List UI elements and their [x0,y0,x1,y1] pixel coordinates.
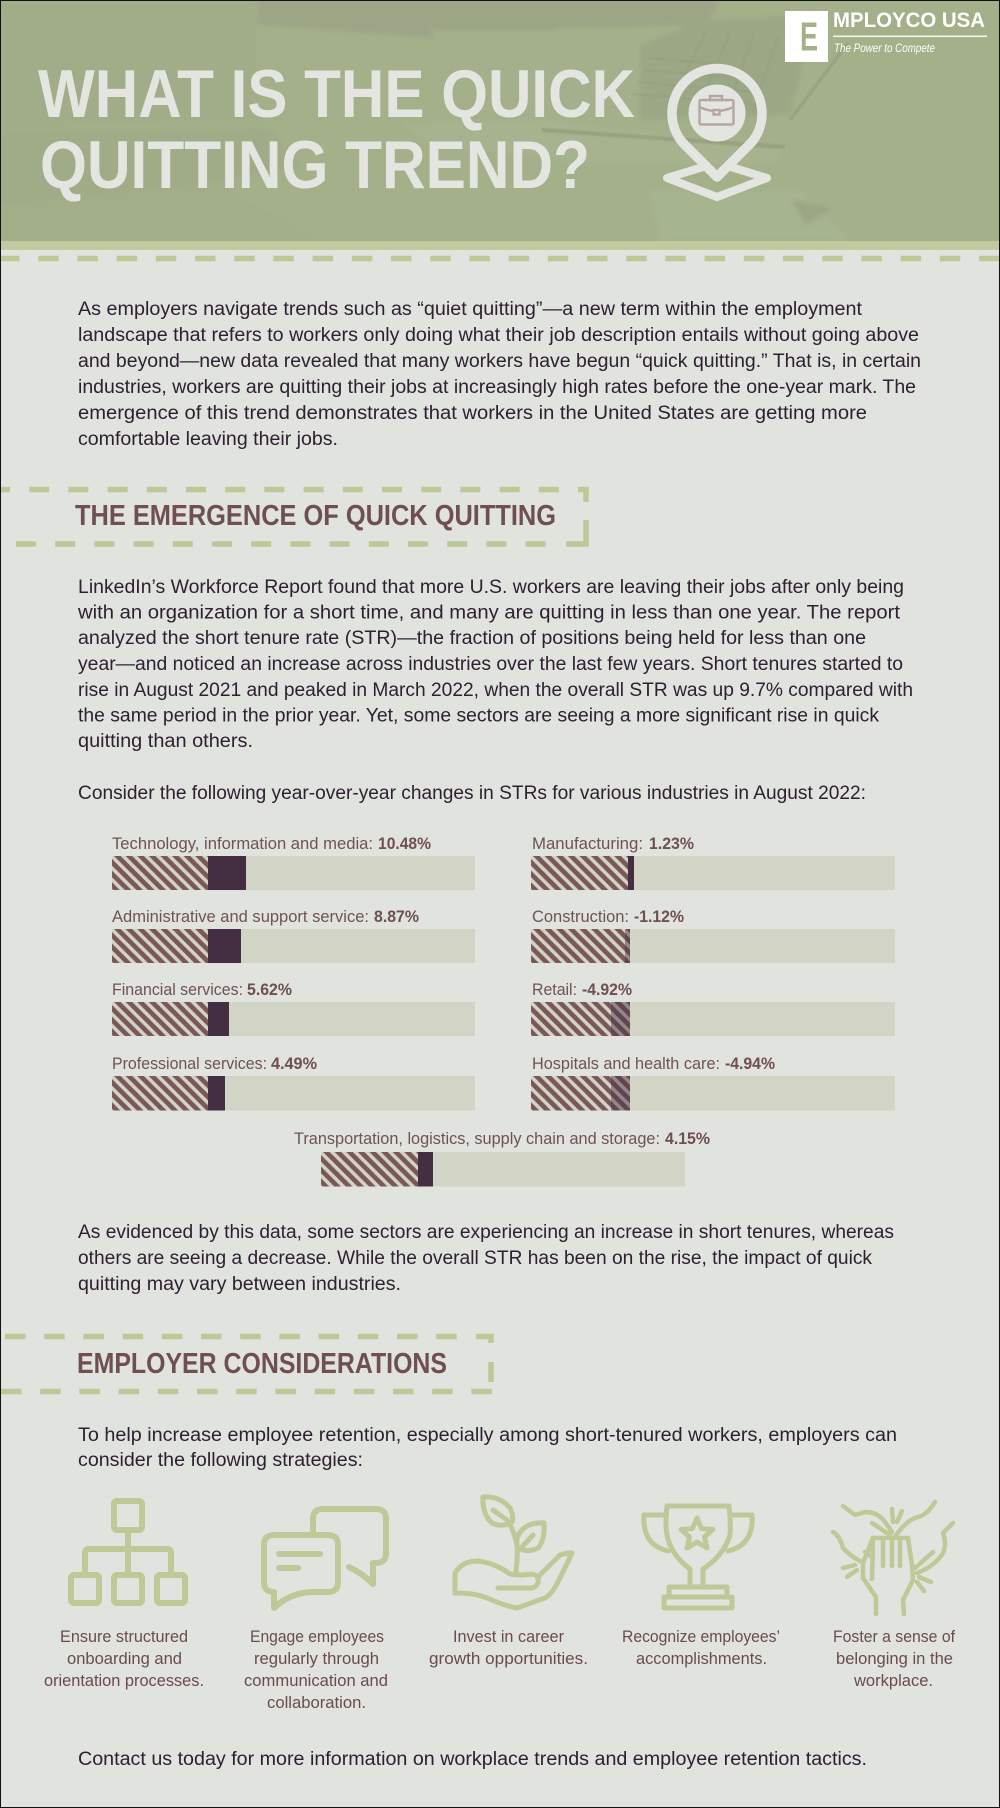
bar: retail: -4.92% [582,980,632,999]
icon: chat bubbles [264,1509,386,1608]
text block: LinkedIn report: with an organization for a short time, and many are quitting in less than one year. The report [77,602,901,624]
strategy: onboarding: orientation processes. [44,1671,204,1690]
title: QUITTING TREND? [40,127,590,203]
heading: the emergence of quick quitting [0,490,586,544]
text block: contact call to action: Contact us today for more information on workplace trends and employee retention tactics. [78,1749,867,1770]
strategy: onboarding: Ensure structured [60,1627,188,1646]
text block: strategies intro: To help increase employee retention, especially among short-tenured workers, employers can [78,1425,897,1446]
strategy: engagement: Engage employees [250,1627,384,1646]
bar: transportation: 4.15% [665,1129,710,1148]
text block: LinkedIn report: the same period in the prior year. Yet, some sectors are seeing a more significant rise in quick [78,706,880,726]
logo [785,9,987,62]
text block: strategies intro: consider the following strategies: [78,1450,363,1471]
bar: financial: Financial services: [112,980,243,999]
bar: manufacturing [531,834,895,890]
text block: introduction: and beyond—new data revealed that many workers have begun “quick quitting.” That is, in certain [78,351,921,372]
strategy: recognition: accomplishments. [636,1649,767,1668]
strategy: career growth [429,1497,588,1668]
strategy: career growth: Invest in career [453,1627,564,1646]
panel: header banner [0,0,1000,258]
bar: retail: Retail: [532,980,577,999]
strategy: recognition [622,1506,780,1668]
bar: professional: Professional services: [112,1054,267,1073]
logo: E [800,14,818,60]
text block: introduction: industries, workers are quitting their jobs at increasingly high rates before the one-year mark. The [78,377,916,398]
strategy: belonging: Foster a sense of [833,1627,955,1646]
bar: manufacturing: Manufacturing: [532,834,643,853]
strategy: engagement: regularly through [254,1649,379,1668]
bar: construction [531,907,895,963]
bar: professional [112,1054,475,1110]
strategy: onboarding [44,1501,204,1690]
header dashed line [0,256,1000,261]
icon: org chart [71,1501,185,1603]
bar: administrative: Administrative and support service: [112,907,369,926]
strategy: engagement: communication and [244,1671,388,1690]
text block: LinkedIn report: rise in August 2021 and peaked in March 2022, when the overall STR was up 9.7% compared with [78,680,913,701]
icon: location pin with briefcase [667,69,767,197]
strategy: engagement [244,1509,388,1712]
heading: employer considerations [1,1336,492,1392]
strategy: onboarding: onboarding and [67,1649,182,1668]
text block: introduction: comfortable leaving their jobs. [78,429,338,450]
strategy: engagement: collaboration. [267,1693,366,1712]
title: WHAT IS THE QUICK [38,56,635,132]
strategy: belonging: workplace. [853,1671,933,1690]
text block: LinkedIn report [77,577,913,752]
bar: construction: -1.12% [634,907,684,926]
bar: technology: Technology, information and media: [112,834,373,853]
logo: The Power to Compete [834,41,935,55]
icon: hands together [833,1502,953,1614]
bar: construction: Construction: [532,907,629,926]
strategy: belonging: belonging in the [836,1649,953,1668]
text block: chart conclusion [78,1222,894,1295]
bar: financial [112,980,475,1036]
text block: LinkedIn report: quitting than others. [78,731,253,752]
bar: administrative: 8.87% [374,907,419,926]
title [38,56,635,203]
bar: manufacturing: 1.23% [649,834,694,853]
bar: hospitals: Hospitals and health care: [532,1054,720,1073]
text block: LinkedIn report: LinkedIn’s Workforce Report found that more U.S. workers are leaving their jobs after only being [78,577,904,598]
bar: professional: 4.49% [271,1054,317,1073]
icon: trophy with star [644,1506,752,1608]
text block: strategies intro [78,1425,897,1471]
text block: chart conclusion: As evidenced by this data, some sectors are experiencing an increase in short tenures, whereas [78,1222,894,1243]
bar: administrative [112,907,475,963]
heading: the emergence of quick quitting: THE EMERGENCE OF QUICK QUITTING [75,500,556,532]
header photo background [0,0,1000,241]
bar chart: year-over-year STR changes [112,834,895,1186]
bar: financial: 5.62% [247,980,292,999]
bar: transportation [294,1129,710,1186]
text block: introduction [78,299,921,450]
logo: MPLOYCO USA [833,9,985,32]
text block: chart conclusion: others are seeing a decrease. While the overall STR has been on the rise, the impact of quick [78,1248,873,1269]
text block: introduction: emergence of this trend demonstrates that workers in the United States are getting more [78,403,867,424]
strategy: belonging [833,1502,955,1690]
bar: hospitals: -4.94% [725,1054,775,1073]
bar: technology [112,834,475,890]
text block: LinkedIn report: year—and noticed an increase across industries over the last few years. Short tenures started to [78,654,903,675]
strategy: career growth: growth opportunities. [429,1649,588,1668]
icon: plant in hand [455,1497,572,1608]
heading: employer considerations: EMPLOYER CONSIDERATIONS [77,1348,447,1380]
strategy: recognition: Recognize employees’ [622,1627,780,1646]
bar: hospitals [531,1054,895,1110]
text block: LinkedIn report: analyzed the short tenure rate (STR)—the fraction of positions being held for less than one [78,628,866,649]
bar: retail [531,980,895,1036]
text block: introduction: landscape that refers to workers only doing what their job description entails without going above [78,325,919,346]
text block: chart conclusion: quitting may vary between industries. [78,1274,401,1295]
bar: technology: 10.48% [378,834,431,853]
header lower band [0,241,1000,250]
text block: introduction: As employers navigate trends such as “quiet quitting”—a new term within the employment [78,299,863,320]
text block: chart intro: Consider the following year-over-year changes in STRs for various industries in August 2022: [78,783,866,804]
bar: transportation: Transportation, logistics, supply chain and storage: [294,1129,660,1148]
